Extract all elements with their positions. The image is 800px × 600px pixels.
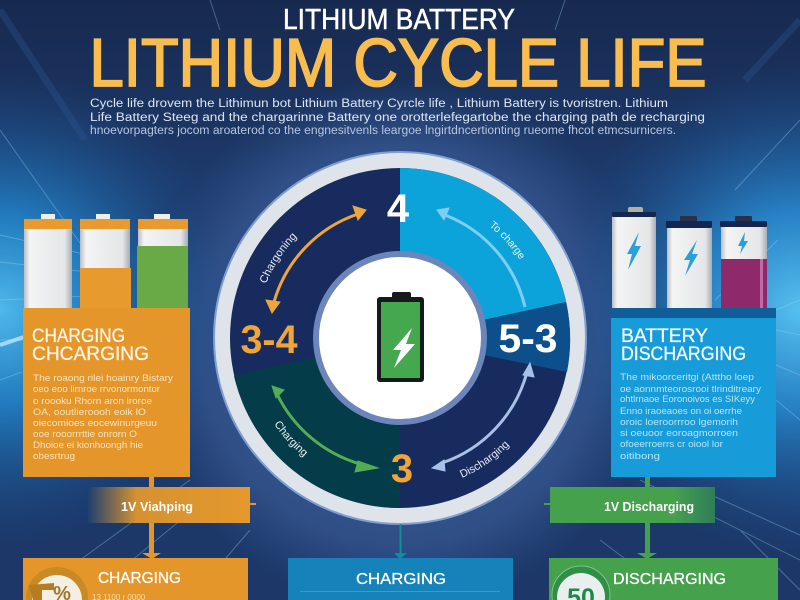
bar: 1V discharging: [544, 487, 715, 523]
heading: charging: CHARGING: [32, 326, 125, 347]
body text: charging: Dhoioe ei kionhoongh hie: [33, 440, 143, 451]
title: Lithium Battery: LITHIUM BATTERY: [283, 4, 515, 36]
arrow: circle to bottom center: [394, 524, 407, 559]
number 5-3: 5-3: [498, 317, 558, 361]
panel: charging: [23, 308, 190, 477]
segment: light blue: [400, 168, 566, 338]
intro paragraph: Cycle life drovem the Lithimun bot Lithium Battery Cyrcle life , Lithium Battery is tvoristren. Lithium: [90, 98, 668, 110]
battery 5: [666, 216, 712, 309]
body text: discharging: si oeuoor eoroagmorroen: [620, 428, 738, 439]
body text: charging: OA, ooutlieroooh eoik lO: [33, 407, 146, 418]
arrow: bar to bottom left: [142, 523, 161, 559]
arrow: charging green: [272, 386, 378, 472]
intro paragraph: Life Battery Steeg and the chargarinne Battery one orotterlefegartobe the charging path de recharging: [90, 112, 705, 124]
connector: left panel to bar: [149, 477, 154, 488]
panel: bottom center: [288, 558, 513, 600]
bar: 1V charging: 1V Viahping: [121, 500, 193, 514]
panel: bottom discharging: [549, 558, 778, 600]
battery 4: [612, 207, 656, 309]
disc: navy base: [230, 168, 570, 508]
body text: discharging: [620, 372, 761, 462]
battery 1: [24, 214, 72, 309]
heading: discharging: BATTERY: [621, 326, 708, 347]
body text: charging: obesrtrug: [33, 451, 75, 462]
heading: charging: CHCARGING: [32, 344, 149, 365]
battery 2: [80, 214, 131, 309]
panel: bottom center: CHARGING: [356, 571, 446, 588]
battery 3: [137, 214, 188, 309]
arc label: discharging: Discharging: [460, 441, 510, 478]
body text: charging: o roooku Rhorn aron iroroe: [33, 396, 152, 407]
segment: teal: [234, 338, 400, 508]
outer ring: [214, 152, 586, 524]
arc label: charging green: Charging: [276, 421, 308, 458]
arrow: top light blue: [437, 208, 525, 307]
bar: 1V discharging: 1V Discharging: [604, 500, 694, 514]
intro paragraph: hnoevorpagters jocom aroaterod co the engnesitvenls leargoe lngirtdncertionting rueome fhcot etmcsurnicers.: [90, 125, 676, 137]
body text: discharging: oroic loeroorrroo lgemorih: [620, 417, 738, 428]
body text: charging: ooe rooorrrttie onrorn O: [33, 429, 137, 440]
battery 6: [720, 216, 767, 309]
segment: mid blue: [400, 302, 570, 372]
arrow: charging orange: [266, 206, 366, 313]
body text: charging: [33, 373, 173, 462]
heading: charging: [32, 326, 149, 365]
heading: discharging: [621, 326, 746, 365]
panel: bottom discharging: DISCHARGING: [613, 571, 726, 588]
panel: bottom charging: CHARGING: [98, 570, 181, 587]
arc label: to charge: To charge: [491, 220, 524, 259]
panel: battery discharging: [611, 308, 776, 477]
number 3: 3: [391, 447, 413, 491]
bar: 1V charging: [88, 487, 256, 523]
body text: discharging: oe aonnmteorosrooi tlrinditreary: [620, 384, 761, 395]
connector: right panel to bar: [645, 477, 650, 488]
body text: discharging: The mikoorceritgi (Atttho loep: [620, 372, 754, 383]
arrow: bar to bottom right: [637, 523, 657, 559]
intro paragraph: [90, 98, 705, 137]
heading: discharging: DISCHARGING: [621, 344, 746, 365]
body text: discharging: ohtlrnaoe Eoronoivos es SIKeyy: [620, 394, 755, 405]
badge: charging: [26, 567, 88, 600]
body text: discharging: oitibong: [620, 451, 660, 462]
body text: charging: oiecomioes eocewinurgeuu: [33, 418, 157, 429]
body text: charging: The roaong rilei hoainry Bistary: [33, 373, 173, 384]
panel: bottom charging: [23, 558, 248, 600]
badge: 50: [552, 566, 610, 600]
icon: battery: [377, 292, 424, 382]
batteries: charging: [24, 214, 188, 309]
number 3-4: 3-4: [240, 318, 298, 362]
center hub: [316, 254, 484, 422]
body text: discharging: Enno iraoeaoes on oi oerrhe: [620, 406, 742, 417]
title: Lithium Cycle Life: LITHIUM CYCLE LIFE: [90, 25, 706, 101]
panel: discharging header batteries: [612, 207, 767, 309]
arrow: discharging: [432, 363, 534, 471]
body text: charging: oeo eoo lirnroe rrvonormontor: [33, 384, 160, 395]
number 4: 4: [387, 187, 410, 231]
arc label: charging: Chargoning: [260, 233, 298, 282]
cycle diagram: [213, 151, 587, 525]
body text: discharging: ofoeerroerrs cr oiool lor: [620, 439, 723, 450]
